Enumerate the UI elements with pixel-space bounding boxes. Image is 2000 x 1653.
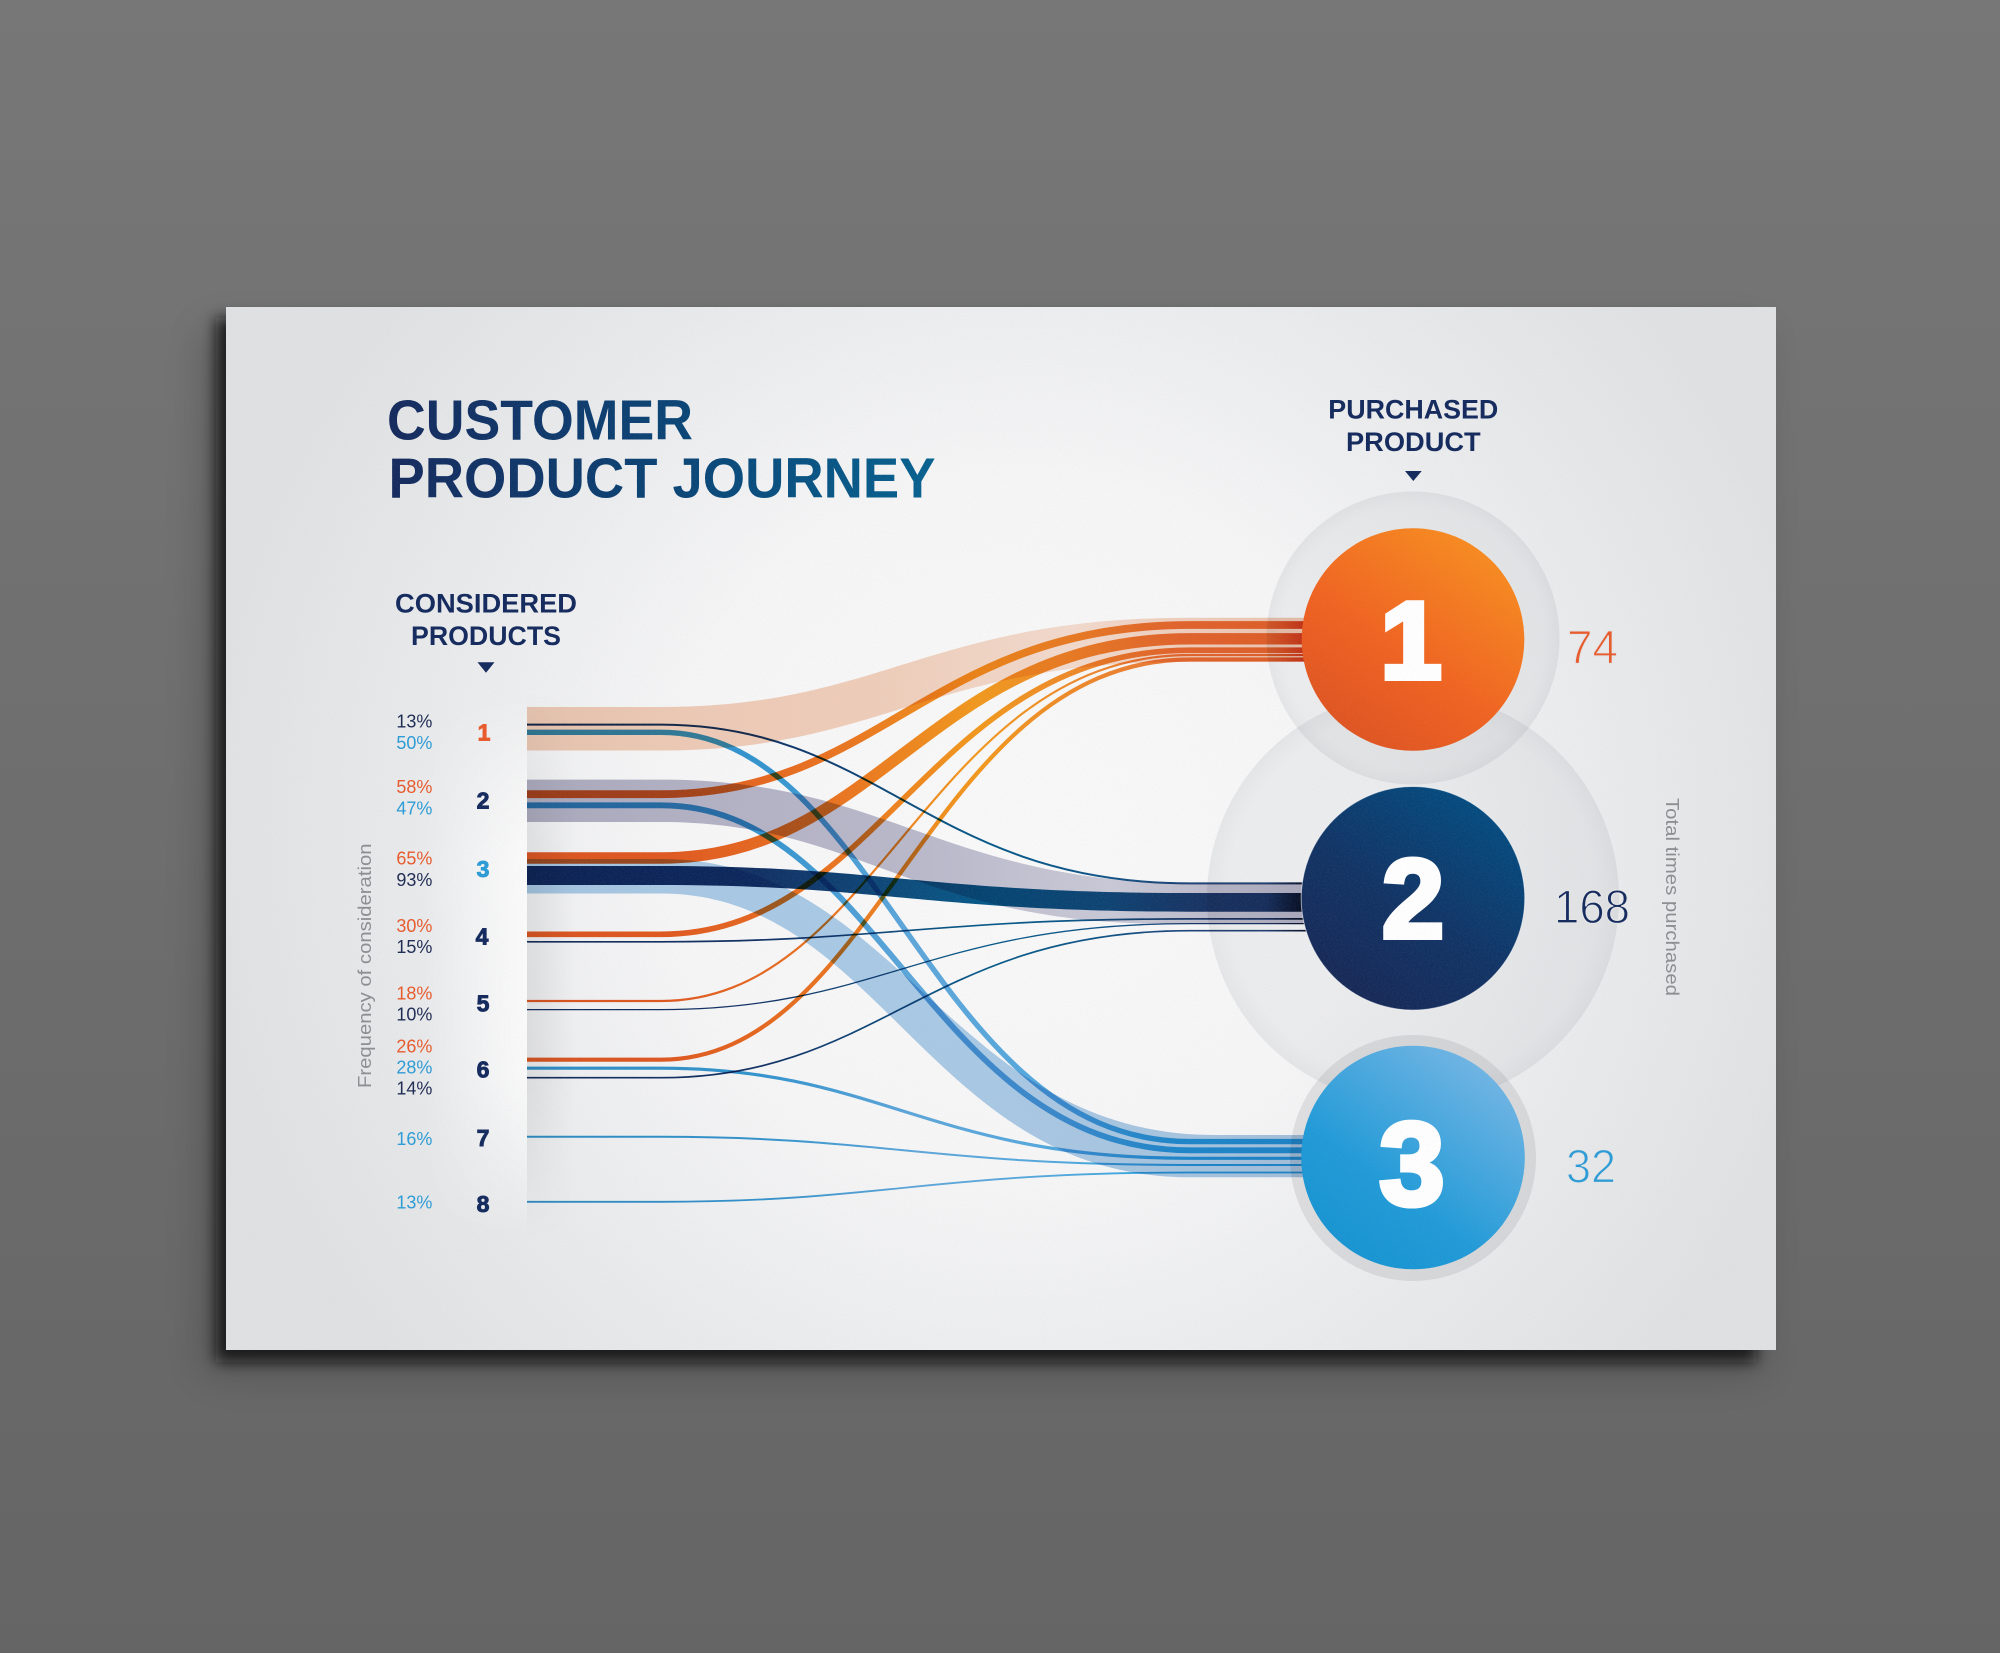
percentages list: 13% — [396, 711, 432, 731]
flows to purchased product 3 — [527, 732, 1310, 1202]
purchase halos — [1207, 492, 1619, 1281]
heading: purchased product: PURCHASED — [1328, 394, 1498, 424]
percentages list: 28% — [396, 1058, 432, 1078]
considered product numbers: 3 — [477, 856, 489, 882]
considered product numbers: 7 — [477, 1125, 489, 1151]
flows to purchased product 1 — [527, 618, 1310, 1060]
title: CUSTOMER — [387, 388, 693, 452]
total value 32: 32 — [1566, 1140, 1616, 1192]
card panel — [226, 307, 1776, 1350]
purchased circle 3: 3 — [1379, 1098, 1445, 1230]
axis label: total times purchased: Total times purchased — [1662, 798, 1682, 996]
percentages list: 15% — [396, 937, 432, 957]
paper grain — [226, 307, 1776, 1350]
total value 74: 74 — [1567, 620, 1618, 674]
purchased circle 2 — [1301, 786, 1525, 1010]
heading: considered products: PRODUCTS — [411, 621, 561, 651]
percentages list: 50% — [396, 733, 432, 753]
purchased circle 1 — [1302, 528, 1524, 751]
considered product numbers: 8 — [477, 1191, 490, 1217]
title: PRODUCT JOURNEY — [388, 446, 936, 510]
flows to purchased product 2 — [527, 725, 1310, 1078]
axis label: frequency of consideration: Frequency of consideration — [355, 844, 375, 1088]
total value 168: 168 — [1554, 880, 1630, 933]
heading: purchased product — [1328, 394, 1498, 481]
percentages list: 47% — [396, 798, 432, 818]
percentages list: 10% — [396, 1004, 432, 1024]
purchased circle 2: 2 — [1382, 836, 1444, 962]
percentages list: 16% — [396, 1129, 432, 1149]
percentages list: 58% — [396, 777, 432, 797]
percentages list: 93% — [396, 870, 432, 890]
percentages list: 18% — [396, 984, 432, 1004]
percentages list: 14% — [396, 1078, 432, 1098]
card shadow — [205, 318, 1760, 1372]
considered product numbers: 5 — [477, 990, 490, 1016]
left column highlight — [476, 768, 552, 1162]
considered product numbers: 6 — [477, 1056, 489, 1082]
considered product numbers — [476, 720, 491, 1217]
percentages list: 65% — [396, 848, 432, 868]
percentages list: 13% — [396, 1192, 432, 1212]
purchased circle 1: 1 — [1381, 580, 1441, 702]
percentages list: 30% — [396, 916, 432, 936]
percentages list: 26% — [396, 1036, 432, 1056]
title — [387, 388, 936, 510]
heading: purchased product: PRODUCT — [1346, 427, 1481, 457]
purchased circle 3 — [1301, 1046, 1525, 1269]
percentages list — [396, 711, 432, 1212]
considered product numbers: 4 — [476, 924, 489, 950]
heading: considered products: CONSIDERED — [395, 588, 577, 618]
considered product numbers: 1 — [478, 720, 491, 746]
heading: considered products — [395, 588, 577, 673]
considered product numbers: 2 — [477, 788, 489, 814]
